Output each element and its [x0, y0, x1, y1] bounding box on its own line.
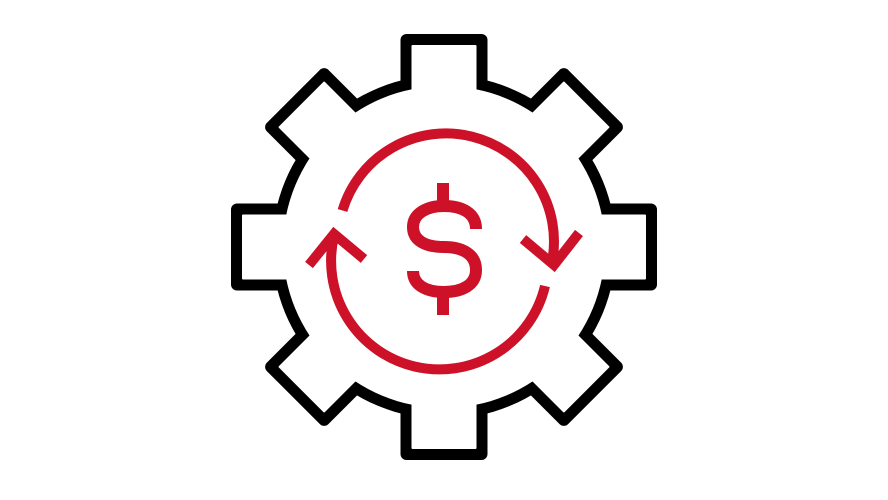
icon: circular arrows	[309, 133, 579, 369]
icon: dollar sign	[413, 183, 476, 315]
icon: gear outline	[231, 34, 657, 460]
